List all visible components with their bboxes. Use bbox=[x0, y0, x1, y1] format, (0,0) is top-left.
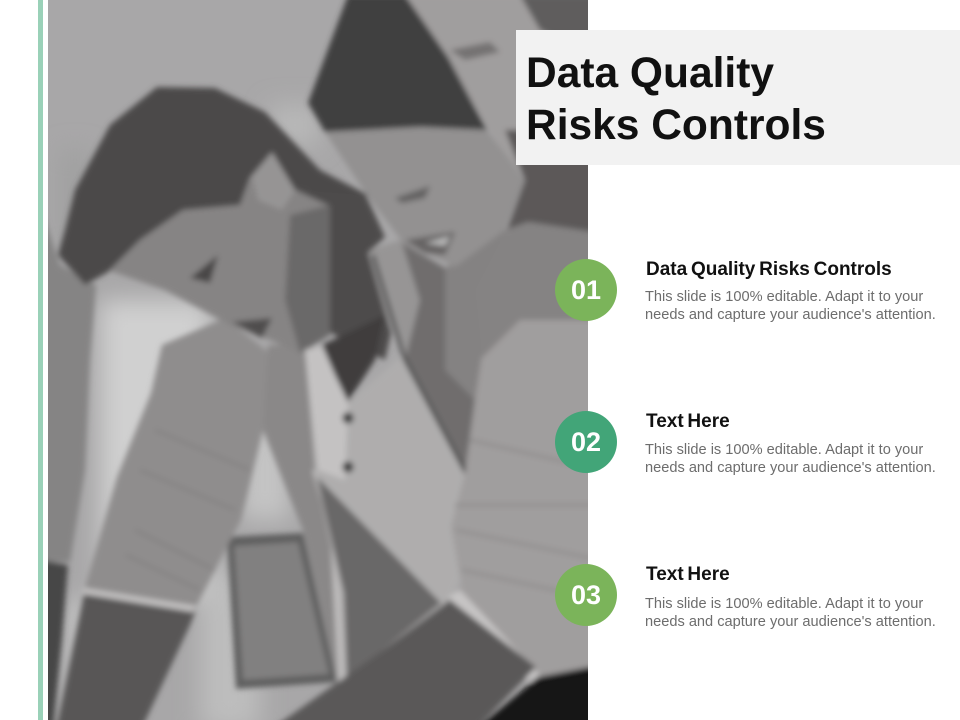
item 1 text bbox=[645, 289, 936, 323]
item 1 text: This slide is 100% editable. Adapt it to your bbox=[645, 289, 923, 305]
title text: Data Quality bbox=[526, 50, 774, 96]
black bottom right bbox=[475, 665, 600, 720]
dark inner cardigan bbox=[317, 477, 441, 676]
title text: Risks Controls bbox=[526, 102, 826, 148]
item 1 number bbox=[555, 259, 617, 321]
item 3 heading: Text Here bbox=[646, 564, 730, 584]
item 3 number: 03 bbox=[571, 580, 601, 610]
man neck bbox=[288, 190, 391, 360]
woman's sweater body behind shirt bbox=[400, 222, 600, 670]
item 1 text: needs and capture your audience's attention. bbox=[645, 307, 936, 323]
woman hair bbox=[308, 0, 487, 132]
item 1 heading: Data Quality Risks Controls bbox=[646, 258, 892, 280]
woman face bbox=[325, 127, 525, 267]
accent stripe bbox=[38, 0, 43, 720]
item 2 text: This slide is 100% editable. Adapt it to your bbox=[645, 442, 923, 458]
woman's upper sleeve bbox=[475, 222, 600, 358]
man's open cardigan bbox=[263, 345, 350, 690]
woman's sleeve bbox=[450, 310, 600, 677]
zipper bbox=[373, 255, 466, 473]
man sweater arm bbox=[84, 318, 272, 607]
item 2 heading: Text Here bbox=[646, 410, 730, 432]
shirt collar shadow bbox=[322, 315, 385, 402]
item 3 text: This slide is 100% editable. Adapt it to your bbox=[645, 596, 923, 612]
woman's cuff bbox=[448, 590, 540, 682]
man face bbox=[108, 150, 328, 353]
left background person bbox=[40, 205, 96, 562]
title panel bbox=[516, 30, 960, 165]
woman's inner collar bbox=[383, 243, 475, 473]
item 2 text bbox=[645, 442, 936, 476]
dark background right of woman bbox=[505, 130, 600, 240]
top man's head bbox=[405, 0, 600, 170]
title text bbox=[526, 50, 826, 148]
item 2 number bbox=[555, 411, 617, 473]
woman's forearm bbox=[270, 600, 536, 720]
white henley shirt bbox=[305, 345, 465, 680]
item 2 text: needs and capture your audience's attention. bbox=[645, 460, 936, 476]
man hair bbox=[58, 87, 368, 285]
man's forearm and cuff bbox=[56, 594, 196, 720]
photo: man and woman looking down bbox=[48, 0, 588, 720]
item 1 number: 01 bbox=[571, 275, 601, 305]
item 3 number bbox=[555, 564, 617, 626]
item 2 number: 02 bbox=[571, 427, 601, 457]
item 3 text bbox=[645, 596, 936, 630]
laptop bbox=[227, 533, 337, 689]
item 3 text: needs and capture your audience's attention. bbox=[645, 614, 936, 630]
